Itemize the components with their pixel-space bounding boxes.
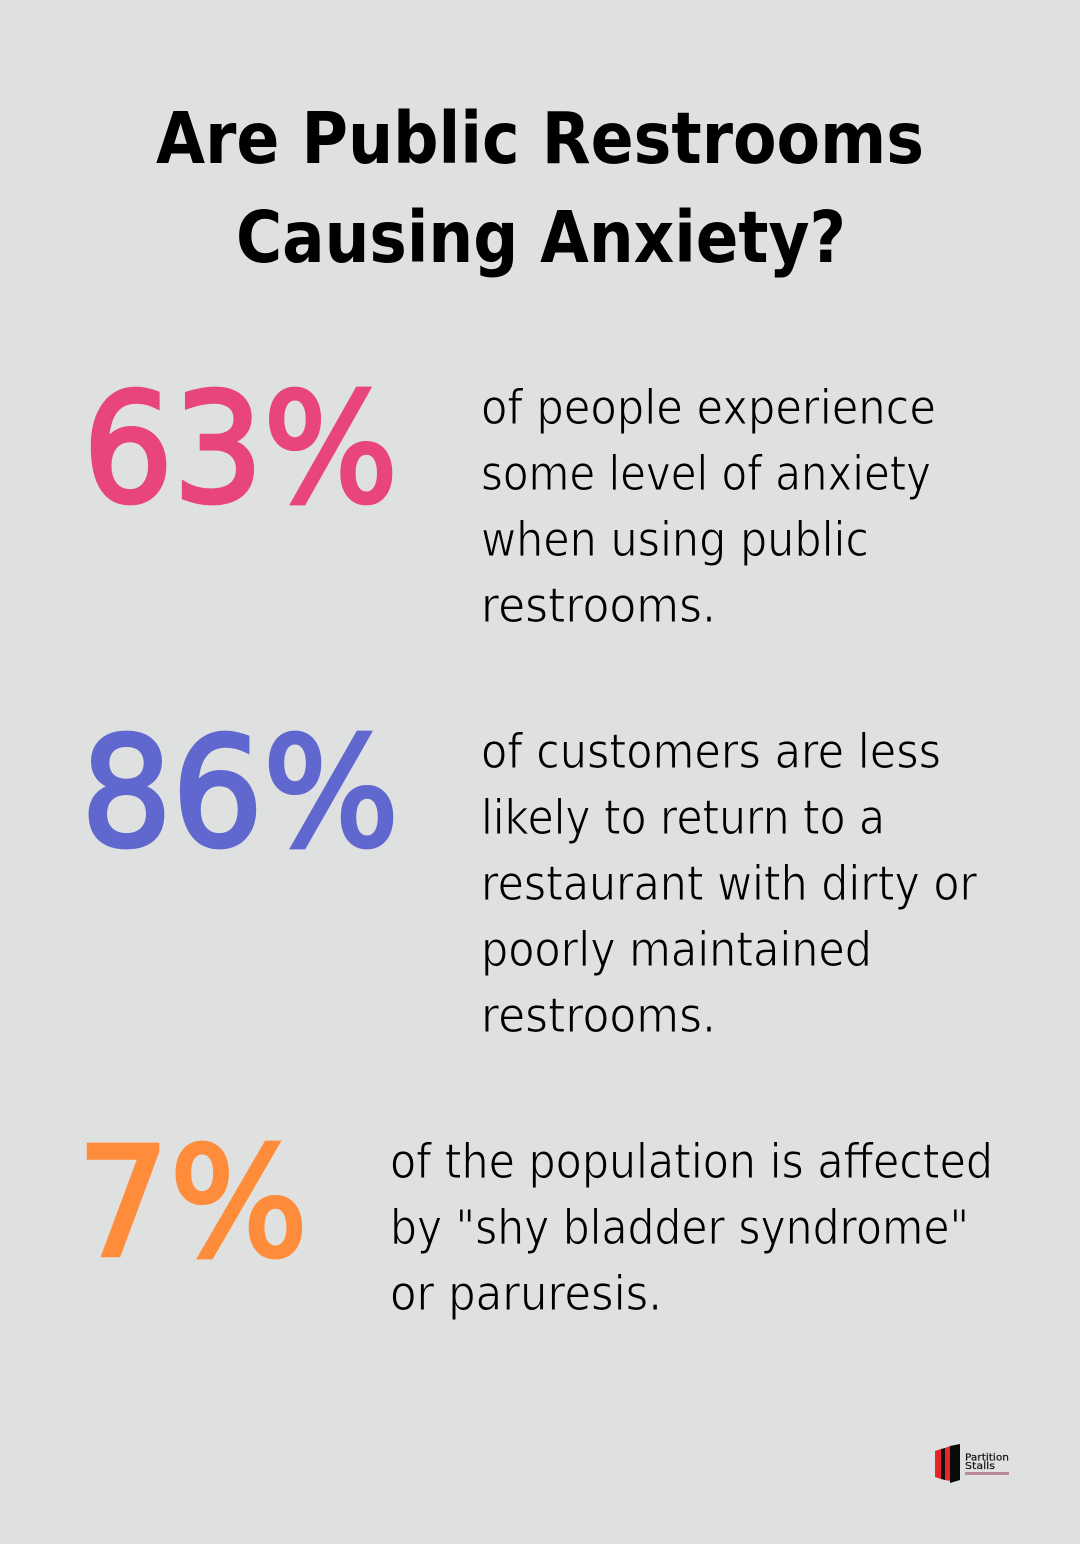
text block: 86% description: restaurant with dirty or bbox=[481, 856, 977, 912]
logo text: Stalls bbox=[965, 1461, 995, 1472]
text block: 7% description: by "shy bladder syndrome" bbox=[390, 1200, 969, 1256]
text block: 86% description: restrooms. bbox=[481, 988, 716, 1044]
text block: 86% description: poorly maintained bbox=[481, 922, 872, 978]
panel: stat 7% bbox=[77, 1115, 993, 1322]
big number: 86%: 86% bbox=[81, 705, 399, 881]
big number: 7%: 7% bbox=[77, 1115, 308, 1291]
text block: 7% description bbox=[390, 1134, 993, 1322]
panel: stat 86% bbox=[81, 705, 977, 1044]
logo text bbox=[965, 1452, 1009, 1472]
icon: partition bars bbox=[935, 1444, 960, 1483]
text block: 63% description bbox=[481, 380, 936, 634]
logo text: Partition bbox=[965, 1452, 1009, 1464]
text block: 63% description: when using public bbox=[481, 512, 869, 568]
text block: 86% description: likely to return to a bbox=[481, 790, 885, 846]
panel: stat 63% bbox=[83, 361, 936, 634]
logo underline bbox=[965, 1472, 1009, 1475]
text block: 63% description: restrooms. bbox=[481, 578, 716, 634]
big number: 63%: 63% bbox=[83, 361, 398, 537]
logo: Partition Stalls bbox=[935, 1444, 1009, 1483]
text block: 63% description: of people experience bbox=[481, 380, 936, 436]
title: Are Public Restrooms bbox=[156, 97, 924, 180]
title: Causing Anxiety? bbox=[236, 196, 846, 279]
title bbox=[156, 97, 924, 279]
text block: 7% description: or paruresis. bbox=[390, 1266, 662, 1322]
text block: 86% description bbox=[481, 724, 977, 1044]
text block: 86% description: of customers are less bbox=[481, 724, 941, 780]
text block: 7% description: of the population is affected bbox=[390, 1134, 993, 1190]
text block: 63% description: some level of anxiety bbox=[481, 446, 931, 502]
